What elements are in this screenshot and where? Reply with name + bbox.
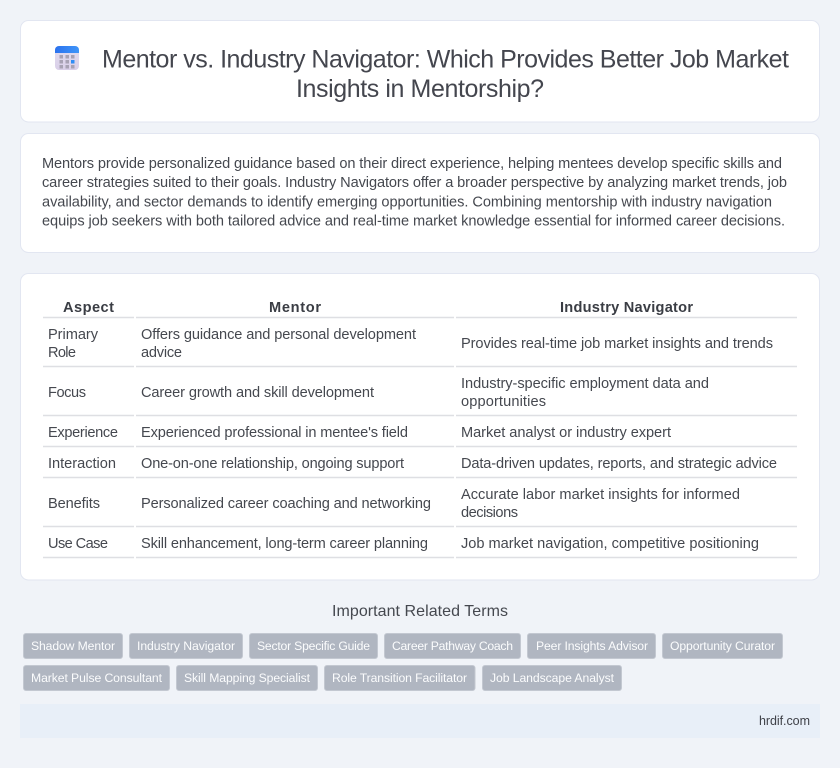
tag: Industry Navigator: Industry Navigator (137, 639, 235, 653)
row: primary role: Provides real-time job market insights and trends (461, 336, 773, 352)
tag: Market Pulse Consultant (24, 666, 170, 690)
tag: Sector Specific Guide: Sector Specific Guide (257, 639, 370, 653)
tag: Sector Specific Guide (250, 634, 378, 658)
tag: Career Pathway Coach: Career Pathway Coach (392, 639, 513, 653)
title (102, 46, 789, 103)
row: focus: Career growth and skill development (141, 385, 374, 401)
tag: Skill Mapping Specialist (176, 666, 318, 690)
panel: summary paragraph (20, 134, 820, 252)
row: benefits (48, 487, 740, 521)
table header: Aspect (63, 300, 114, 316)
tags: related terms (24, 634, 782, 690)
tag: Industry Navigator (130, 634, 242, 658)
row: primary role (48, 327, 773, 361)
row: use case: Skill enhancement, long-term career planning (141, 536, 428, 552)
table header: Industry Navigator (560, 300, 693, 316)
footer band (20, 704, 820, 738)
row: primary role: advice (141, 345, 182, 361)
tag: Opportunity Curator (662, 634, 782, 658)
row: focus: Industry-specific employment data and (461, 376, 709, 392)
heading: related terms: Important Related Terms (332, 603, 508, 620)
row: use case (48, 536, 759, 552)
text block: summary: Mentors provide personalized guidance based on their direct experience, helping mentees develop specific skills and (42, 156, 782, 172)
panel: title card (20, 20, 820, 122)
row: benefits: decisions (461, 505, 518, 521)
row: experience: Market analyst or industry expert (461, 425, 671, 441)
row: benefits: Accurate labor market insights for informed (461, 487, 740, 503)
row: benefits: Personalized career coaching and networking (141, 496, 431, 512)
tag: Job Landscape Analyst: Job Landscape Analyst (490, 671, 615, 685)
row: use case: Use Case (48, 536, 108, 552)
tag: Role Transition Facilitator (324, 666, 475, 690)
row: experience (48, 425, 671, 441)
row: focus: opportunities (461, 394, 546, 410)
footer source: hrdif.com (759, 714, 810, 728)
tag: Shadow Mentor: Shadow Mentor (31, 639, 115, 653)
row: interaction: Interaction (48, 456, 116, 472)
row: focus: Focus (48, 385, 86, 401)
row: focus (48, 376, 709, 410)
table header: Mentor (269, 300, 321, 316)
row: primary role: Offers guidance and personal development (141, 327, 416, 343)
tag: Job Landscape Analyst (482, 666, 622, 690)
tag: Career Pathway Coach (384, 634, 520, 658)
title: Mentor vs. Industry Navigator: Which Provides Better Job Market (102, 46, 789, 74)
table grid lines (43, 318, 797, 558)
icon: calendar (55, 46, 79, 70)
text block: summary: equips job seekers with both tailored advice and real-time market knowledge essential for informed career decisions. (42, 214, 785, 230)
text block: summary: career strategies suited to their goals. Industry Navigators offer a broader perspective by analyzing market trends, job (42, 175, 787, 191)
text block: summary (42, 156, 787, 230)
row: primary role: Primary (48, 327, 99, 343)
title: Insights in Mentorship? (296, 75, 544, 103)
tag: Opportunity Curator: Opportunity Curator (670, 639, 775, 653)
row: interaction: One-on-one relationship, ongoing support (141, 456, 404, 472)
row: interaction: Data-driven updates, reports, and strategic advice (461, 456, 777, 472)
table header (63, 300, 693, 316)
panel: comparison table (20, 274, 820, 580)
tag: Role Transition Facilitator: Role Transition Facilitator (332, 671, 467, 685)
row: interaction (48, 456, 777, 472)
row: primary role: Role (48, 345, 76, 361)
tag: Shadow Mentor (24, 634, 122, 658)
tag: Peer Insights Advisor (528, 634, 656, 658)
row: experience: Experienced professional in mentee's field (141, 425, 408, 441)
tag: Peer Insights Advisor: Peer Insights Advisor (536, 639, 648, 653)
row: benefits: Benefits (48, 496, 100, 512)
tag: Skill Mapping Specialist: Skill Mapping Specialist (184, 671, 311, 685)
tag: Market Pulse Consultant: Market Pulse Consultant (31, 671, 163, 685)
text block: summary: availability, and sector demands to identify emerging opportunities. Combining mentorship with industry navigation (42, 194, 772, 210)
row: use case: Job market navigation, competitive positioning (461, 536, 759, 552)
row: experience: Experience (48, 425, 118, 441)
